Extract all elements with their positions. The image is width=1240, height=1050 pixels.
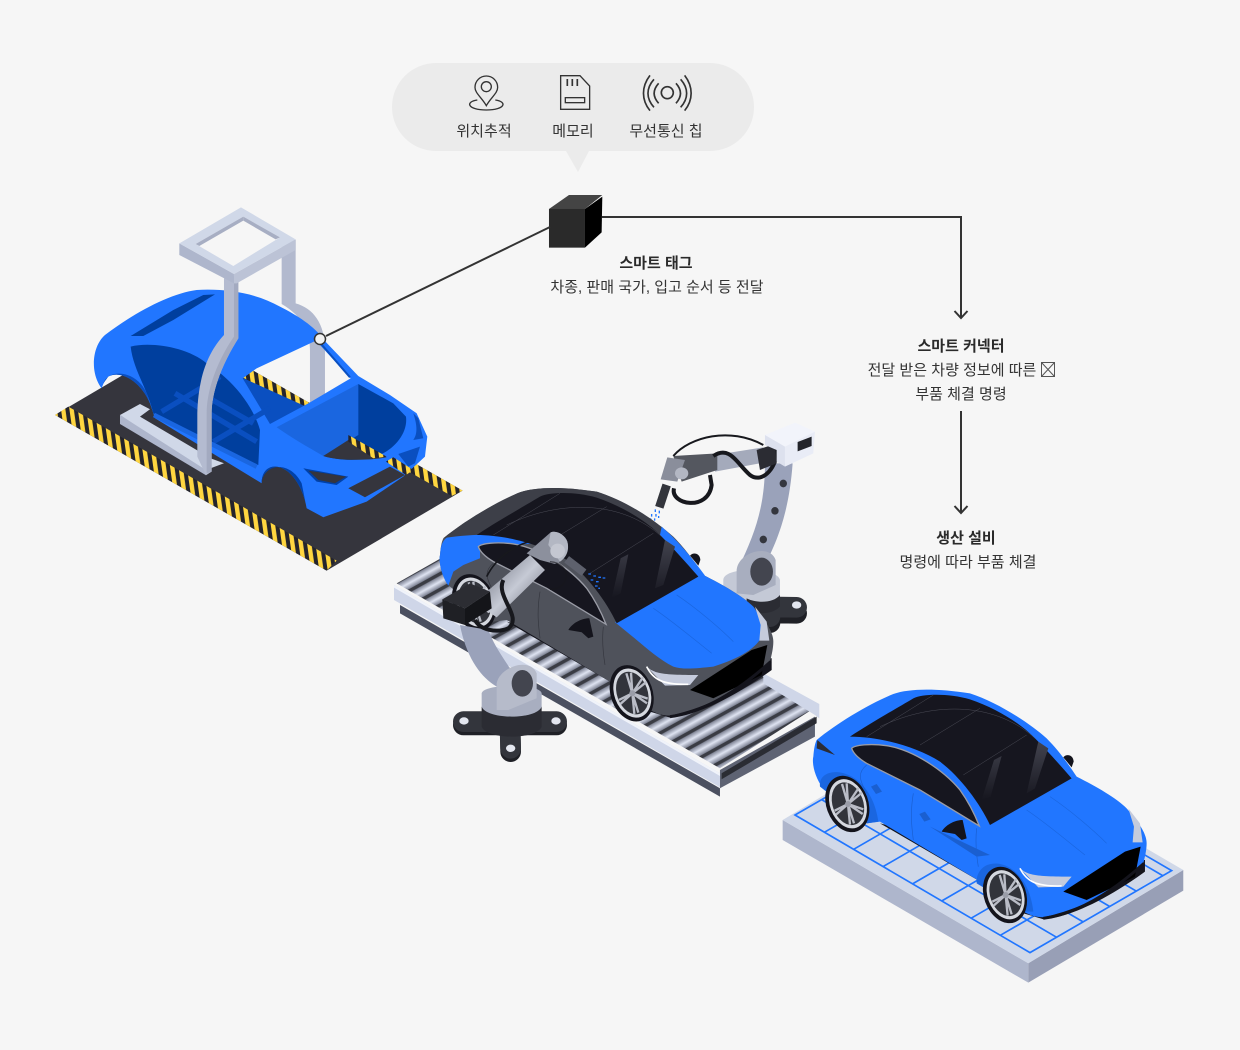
roof slot [131, 294, 215, 336]
grille [1063, 847, 1141, 900]
smart tag cube [549, 195, 602, 248]
front robot yoke [497, 665, 537, 710]
robot cables [673, 435, 777, 503]
roof lines [867, 695, 1035, 775]
platform right side [1028, 870, 1183, 983]
wrist joint [527, 532, 568, 564]
front pillar [197, 275, 238, 475]
text: smart connector: 전달 받은 차량 정보에 따른 [868, 362, 1037, 379]
tail light [755, 607, 769, 641]
rear pillar [282, 240, 325, 403]
interior floor [240, 377, 310, 427]
engine bay floor [323, 440, 387, 460]
front wheel [975, 861, 1035, 929]
front nozzle [567, 559, 584, 573]
front cables [475, 540, 566, 631]
text: smart tag: 스마트 태그 [619, 255, 693, 272]
car 3: finished blue car [813, 690, 1147, 929]
far mirror [690, 553, 700, 566]
underbody shadow [507, 622, 772, 718]
front wheel arch [977, 863, 1033, 912]
headlight [645, 665, 698, 686]
icon: memory card [561, 76, 590, 109]
underbody shadow [880, 823, 1145, 919]
big arm [460, 625, 510, 687]
side window [478, 543, 606, 624]
mirror [942, 820, 967, 840]
blue grid [795, 733, 1172, 953]
car body [440, 488, 773, 716]
horizontal arm [715, 447, 763, 472]
robot arm: front [442, 532, 605, 752]
rear robot yoke [737, 551, 776, 595]
label: memory: 메모리 [552, 123, 594, 140]
front spray [588, 574, 605, 588]
nozzle [659, 485, 667, 507]
bumper shadow [670, 662, 771, 717]
sensor box [757, 423, 815, 470]
car 2: grey car with painted blue panels [440, 488, 773, 728]
rear robot arm [738, 463, 793, 568]
rear robot base [750, 601, 801, 623]
door openings [131, 345, 260, 465]
blue roof edge [660, 527, 705, 577]
side crease [930, 827, 990, 857]
door lines [487, 563, 605, 665]
text: smart tag: 차종, 판매 국가, 입고 순서 등 전달 [550, 279, 764, 296]
bumper shadow [1043, 863, 1144, 918]
grille opening [348, 467, 405, 497]
blue spray [651, 509, 659, 521]
rear wheel [444, 568, 504, 637]
glass glare [612, 540, 675, 598]
robot arm: rear [651, 423, 815, 623]
headlight [1018, 867, 1072, 887]
door handles [871, 784, 931, 822]
blue rear quarter [440, 535, 537, 586]
icon: location pin [470, 76, 503, 110]
front rail [394, 585, 720, 787]
front wheel arch [262, 467, 307, 508]
car body [813, 690, 1147, 917]
bumper recesses [413, 413, 423, 440]
right end dark bar [722, 717, 817, 779]
hood lines [653, 595, 733, 653]
hazard strips [55, 335, 463, 571]
engine bay hazard [348, 435, 387, 458]
hood lines [1027, 797, 1107, 855]
text: production equipment: 명령에 따라 부품 체결 [900, 554, 1036, 571]
front robot pedestal [482, 707, 542, 737]
roof glass [477, 493, 698, 623]
rear wheel arch [820, 772, 878, 823]
text: production equipment: 생산 설비 [936, 530, 996, 547]
headlight opening [303, 468, 348, 485]
arrow: connector to equipment [954, 411, 968, 513]
sill [154, 415, 257, 467]
tool head [661, 453, 717, 482]
grille hazard [386, 457, 413, 475]
tail light [1128, 808, 1143, 842]
text: production equipment [900, 530, 1036, 571]
rear wheel arch [103, 374, 153, 413]
conveyor undercarriage [400, 605, 720, 797]
black box [442, 583, 492, 625]
mirror [568, 618, 593, 638]
hood bay left [277, 384, 358, 456]
glass glare [982, 742, 1048, 800]
grille [690, 645, 767, 698]
floor [55, 335, 463, 571]
back rail [763, 673, 819, 718]
roof glass [850, 695, 1072, 825]
rear dark notch [817, 740, 835, 755]
dark roof surround [443, 488, 663, 538]
platform top [783, 727, 1183, 963]
far mirror [1063, 755, 1074, 767]
rear robot pedestal [723, 570, 780, 606]
front wheel [602, 659, 661, 728]
station 2: conveyor [394, 527, 819, 797]
text: smart connector: 스마트 커넥터 [917, 338, 1005, 355]
base rail [120, 404, 224, 475]
arrow: tag to connector [602, 217, 968, 318]
text: smart tag [550, 255, 764, 296]
station 1: car body frame on floor [55, 207, 463, 571]
speech bubble: smart tag components [392, 63, 754, 172]
connector line: car to tag [314, 227, 550, 344]
rollers [397, 527, 817, 768]
platform left side [783, 820, 1028, 983]
side window [852, 745, 979, 826]
station 3: inspection platform [783, 727, 1183, 983]
label: wireless chip: 무선통신 칩 [629, 123, 703, 140]
upper arm tube [487, 555, 545, 617]
windshield strut shade [320, 343, 350, 377]
door lines [860, 765, 978, 867]
car body shell [94, 290, 427, 517]
hood bay right [323, 384, 406, 460]
blue hood [615, 575, 763, 669]
icon: wireless signal [643, 75, 691, 111]
top frame [179, 207, 296, 283]
rear wheel [818, 770, 877, 838]
text: smart connector [868, 338, 1054, 403]
label: location tracking: 위치추적 [456, 123, 512, 140]
text: smart connector: 부품 체결 명령 [915, 386, 1007, 403]
roof lines [493, 493, 662, 573]
front robot base [459, 717, 561, 752]
floor pan bars [162, 377, 270, 442]
